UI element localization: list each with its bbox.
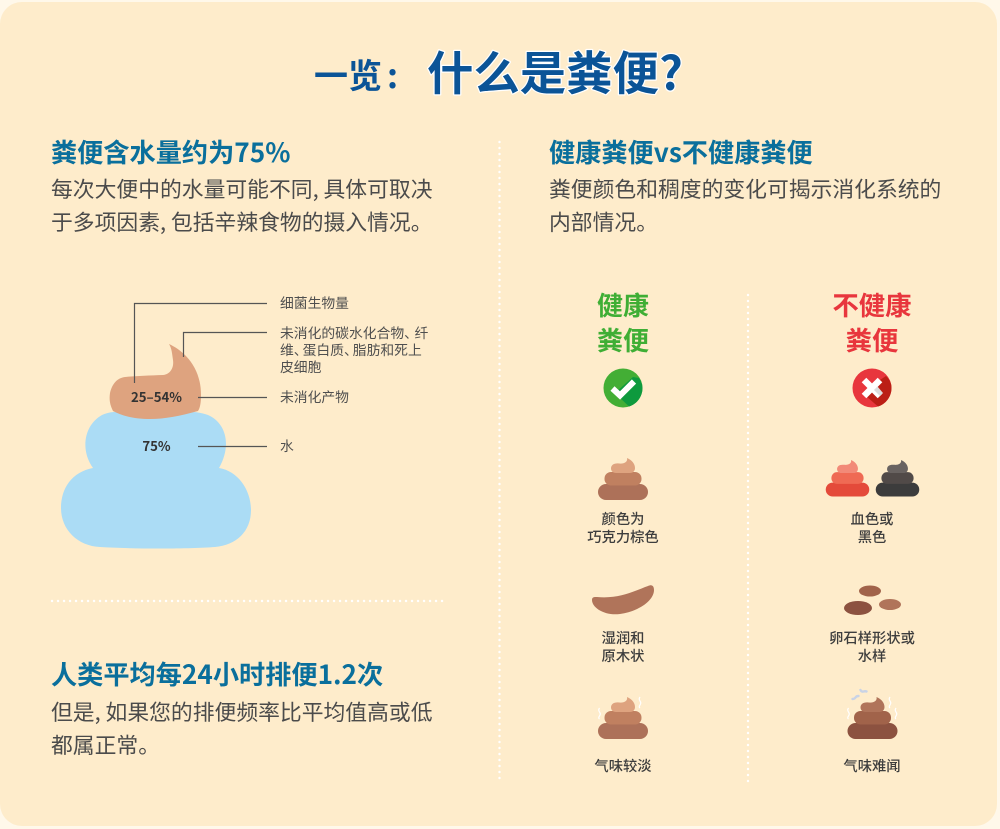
percent labels (131, 387, 182, 455)
caption: moist log: 原木状 (602, 645, 644, 666)
title (314, 37, 683, 104)
caption: blood or black (851, 508, 893, 547)
column heading: unhealthy: 粪便 (846, 319, 899, 358)
undigested portion (110, 344, 201, 419)
text block: healthy vs unhealthy: 粪便颜色和稠度的变化可揭示消化系统的 (549, 173, 941, 204)
text block: water content: 粪便含水量约为75% (51, 132, 290, 170)
chart labels: 未消化产物 (280, 386, 349, 406)
column heading: unhealthy (832, 284, 912, 358)
title: 一览: (314, 49, 398, 98)
icon: brown stool (598, 458, 648, 500)
caption: pebble or watery: 水样 (858, 645, 886, 666)
chart labels: 维、蛋白质、脂肪和死上 (280, 339, 422, 359)
chart labels: 水 (280, 435, 294, 455)
caption: blood or black: 血色或 (851, 508, 893, 529)
text block: water content: 每次大便中的水量可能不同, 具体可取决 (51, 173, 433, 204)
text block: frequency (51, 654, 433, 760)
text block: healthy vs unhealthy: 健康粪便vs不健康粪便 (549, 132, 813, 170)
icon: red stool (826, 460, 869, 497)
icon: red cross (852, 368, 892, 408)
caption: pebble or watery: 卵石样形状或 (829, 627, 915, 648)
water portion (61, 412, 251, 548)
caption: mild odor: 气味较淡 (594, 755, 652, 776)
text block: frequency: 但是, 如果您的排便频率比平均值高或低 (51, 696, 433, 727)
caption: moist log: 湿润和 (602, 627, 644, 648)
text block: healthy vs unhealthy (549, 132, 941, 237)
column heading: healthy (597, 286, 649, 358)
text block: frequency: 都属正常。 (51, 729, 160, 760)
column heading: healthy: 健康 (597, 286, 649, 323)
chart labels: 未消化的碳水化合物、纤 (280, 322, 428, 342)
chart labels: 细菌生物量 (280, 292, 349, 312)
icon: mild odor stool (598, 697, 648, 739)
title: 什么是粪便? (427, 37, 683, 104)
column heading: unhealthy: 不健康 (832, 284, 912, 323)
text block: frequency: 人类平均每24小时排便1.2次 (51, 654, 383, 692)
caption: moist log (602, 627, 644, 666)
percent labels: 75% (142, 436, 171, 455)
icon: pebbles (844, 586, 901, 615)
caption: foul odor: 气味难闻 (843, 755, 901, 776)
chart: stool composition (61, 292, 428, 548)
icon: log stool (592, 585, 654, 614)
text block: healthy vs unhealthy: 内部情况。 (549, 206, 658, 237)
caption: chocolate brown: 颜色为 (602, 508, 644, 529)
caption: chocolate brown: 巧克力棕色 (587, 526, 659, 547)
percent labels: 25–54% (131, 387, 182, 406)
caption: chocolate brown (587, 508, 659, 547)
column heading: healthy: 粪便 (597, 321, 649, 358)
caption: blood or black: 黑色 (858, 526, 886, 547)
caption: pebble or watery (829, 627, 915, 666)
chart labels (280, 292, 428, 455)
leader lines (134, 304, 267, 446)
icon: black stool (876, 460, 919, 497)
chart labels: 皮细胞 (280, 356, 322, 376)
icon: foul odor stool (848, 690, 898, 739)
text block: water content (51, 132, 433, 237)
icon: green check (604, 368, 642, 408)
text block: water content: 于多项因素, 包括辛辣食物的摄入情况。 (51, 206, 432, 237)
